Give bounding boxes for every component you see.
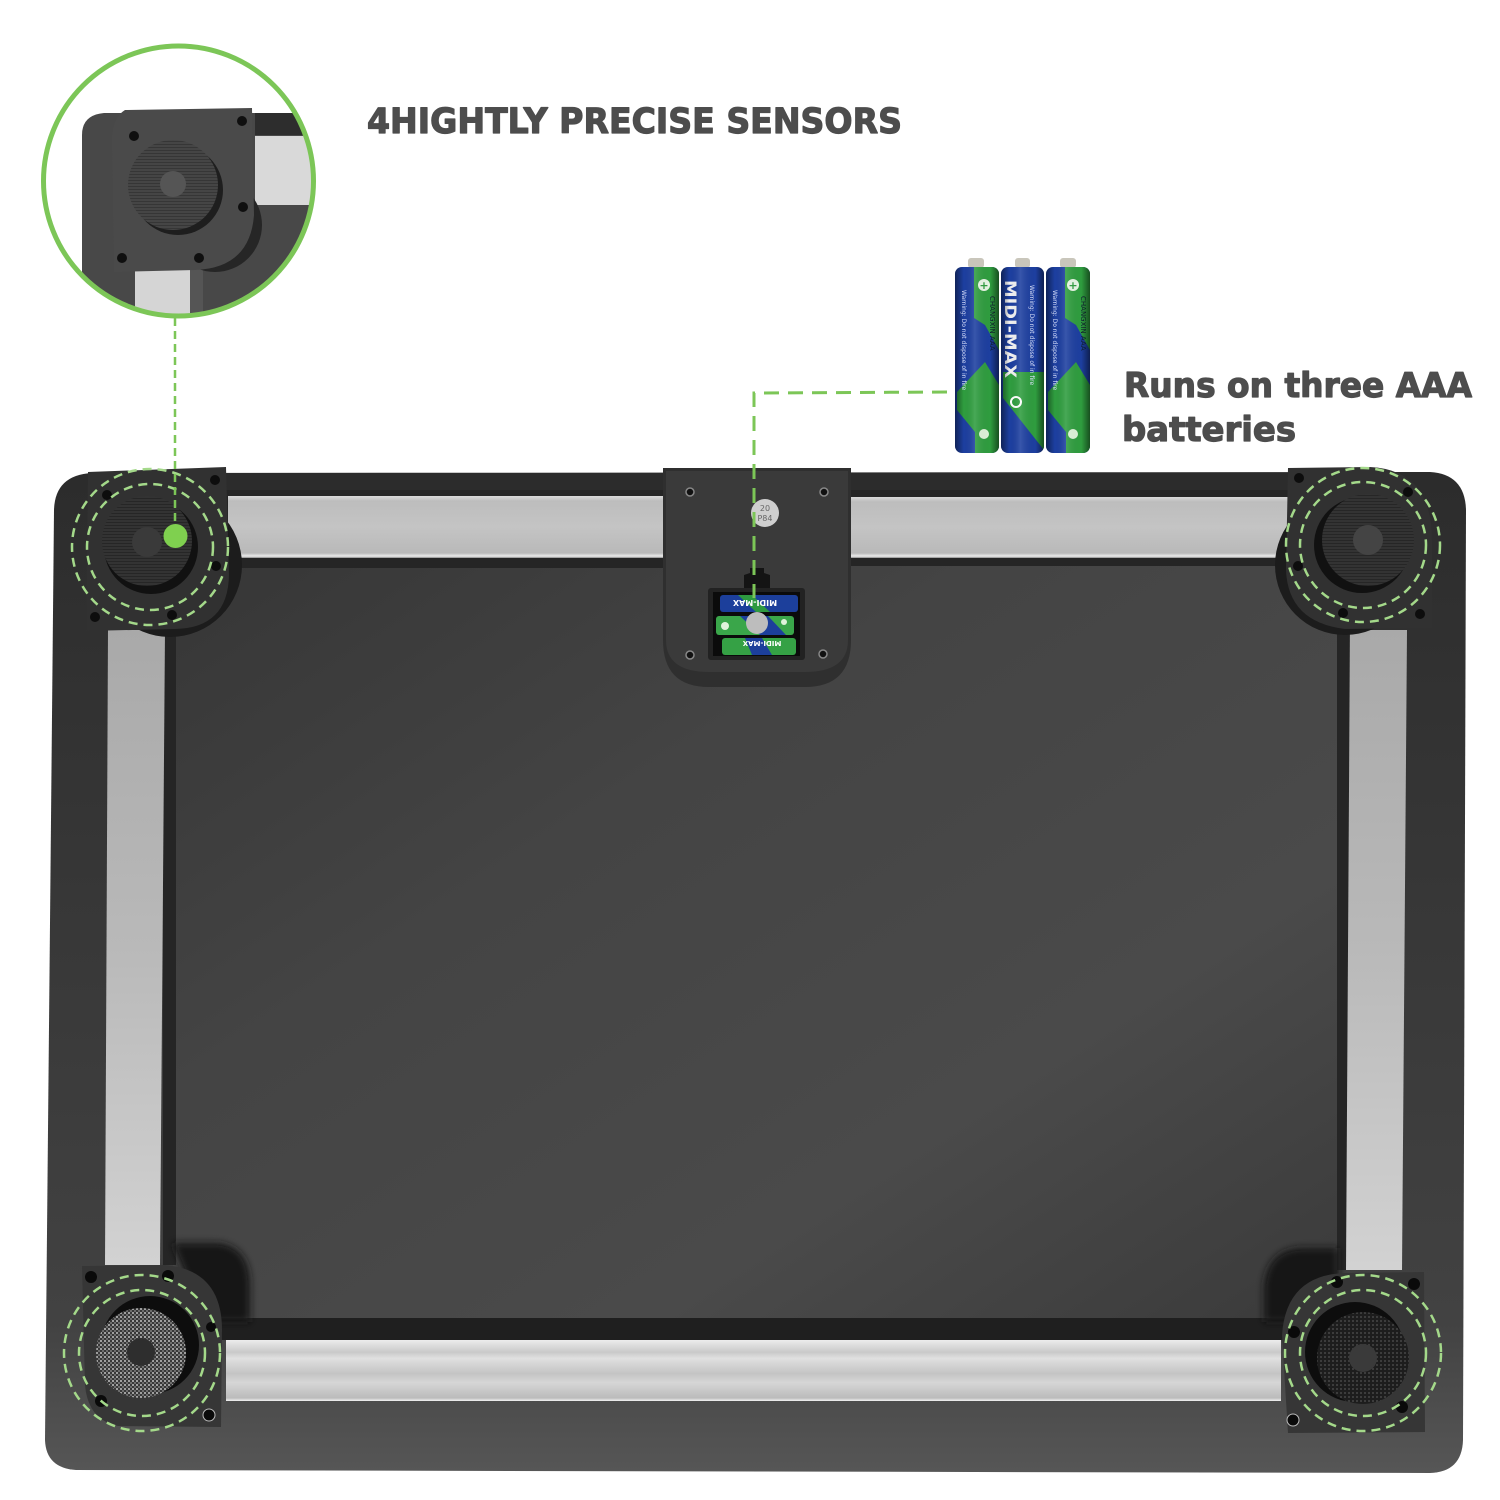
installed batteries: MIDI-MAX [742, 639, 781, 647]
rail: top left [228, 496, 665, 558]
screws [90, 475, 221, 622]
silver sticker [751, 499, 779, 527]
battery 1 [955, 258, 999, 453]
module plate [663, 468, 851, 687]
inset plate shadow [200, 198, 262, 272]
silver sticker: 20 [760, 504, 770, 513]
inset ring [44, 46, 314, 316]
screws [1287, 1276, 1420, 1426]
battery 2: Warning: Do not dispose of in fire [1028, 285, 1035, 386]
mount plate [82, 1265, 222, 1427]
rubber foot [1305, 1302, 1405, 1402]
mount plate [86, 467, 229, 631]
heading: batteries: Runs on three AAA [1124, 366, 1473, 406]
rail: left [105, 630, 165, 1265]
heading: sensors: 4HIGHTLY PRECISE SENSORS [367, 102, 902, 142]
mount plate [1282, 1272, 1425, 1433]
sensor: top left [86, 467, 242, 637]
heading: batteries: batteries [1122, 410, 1296, 450]
callout dot on battery [746, 612, 768, 634]
compartment clip [744, 568, 770, 588]
battery 1: Warning: Do not dispose of in fire [960, 290, 967, 391]
AAA batteries [955, 258, 1090, 453]
rail: bottom [226, 1340, 1281, 1401]
sensor: bottom right [1264, 1248, 1425, 1433]
battery module [663, 468, 851, 687]
panel bottom shadow [220, 1318, 1300, 1340]
dashed rings around sensors [64, 468, 1441, 1431]
battery 2 [1001, 258, 1044, 453]
scale underside board [45, 472, 1466, 1473]
rail: top right [850, 497, 1288, 558]
silver sticker: P84 [757, 514, 773, 523]
inset screws [117, 116, 248, 263]
inset rail bottom [190, 270, 203, 313]
mount shadow [1275, 495, 1415, 635]
sensor: bottom left [82, 1243, 250, 1427]
sensor: top right [1275, 467, 1432, 635]
inner recessed panel [173, 562, 1339, 1324]
mount plate [1286, 467, 1432, 629]
battery 3: Warning: Do not dispose of in fire [1051, 290, 1058, 391]
installed batteries [716, 595, 798, 655]
battery 1: + [979, 279, 989, 292]
mount shadow [172, 1243, 250, 1322]
battery 3 [1046, 258, 1090, 453]
heading: batteries [1122, 366, 1473, 450]
rubber foot [1314, 497, 1410, 593]
module screws [686, 488, 828, 659]
battery 3: CHANGXIN AAA [1079, 296, 1087, 351]
foot hub [127, 1338, 155, 1366]
installed batteries: MIDI-MAX [732, 598, 777, 607]
sensor callout: dot [164, 524, 188, 548]
rubber foot [104, 500, 198, 594]
inset rail right [255, 113, 302, 135]
battery 1: CHANGXIN AAA [988, 296, 996, 351]
battery callout: dashed leader line [754, 392, 947, 598]
compartment frame [708, 588, 805, 660]
foot hub [1353, 525, 1383, 555]
rail: right [1346, 630, 1407, 1270]
battery 2: MIDI-MAX [1001, 280, 1020, 379]
inset foot [144, 156, 223, 235]
sensor callout: dashed leader line [174, 318, 176, 530]
mount shadow [1264, 1248, 1338, 1322]
screws [85, 1270, 216, 1421]
screws [1293, 473, 1425, 619]
rail shadows [163, 490, 1349, 1270]
inset plate [112, 108, 254, 272]
inset white background [40, 40, 320, 320]
foot hub [132, 527, 162, 557]
battery 3: + [1068, 279, 1078, 292]
sensor zoom inset [40, 40, 325, 325]
board outline [45, 472, 1466, 1473]
inset board corner [82, 113, 320, 320]
mount shadow [98, 493, 242, 637]
foot hub [1349, 1344, 1377, 1372]
rubber foot [101, 1296, 199, 1394]
